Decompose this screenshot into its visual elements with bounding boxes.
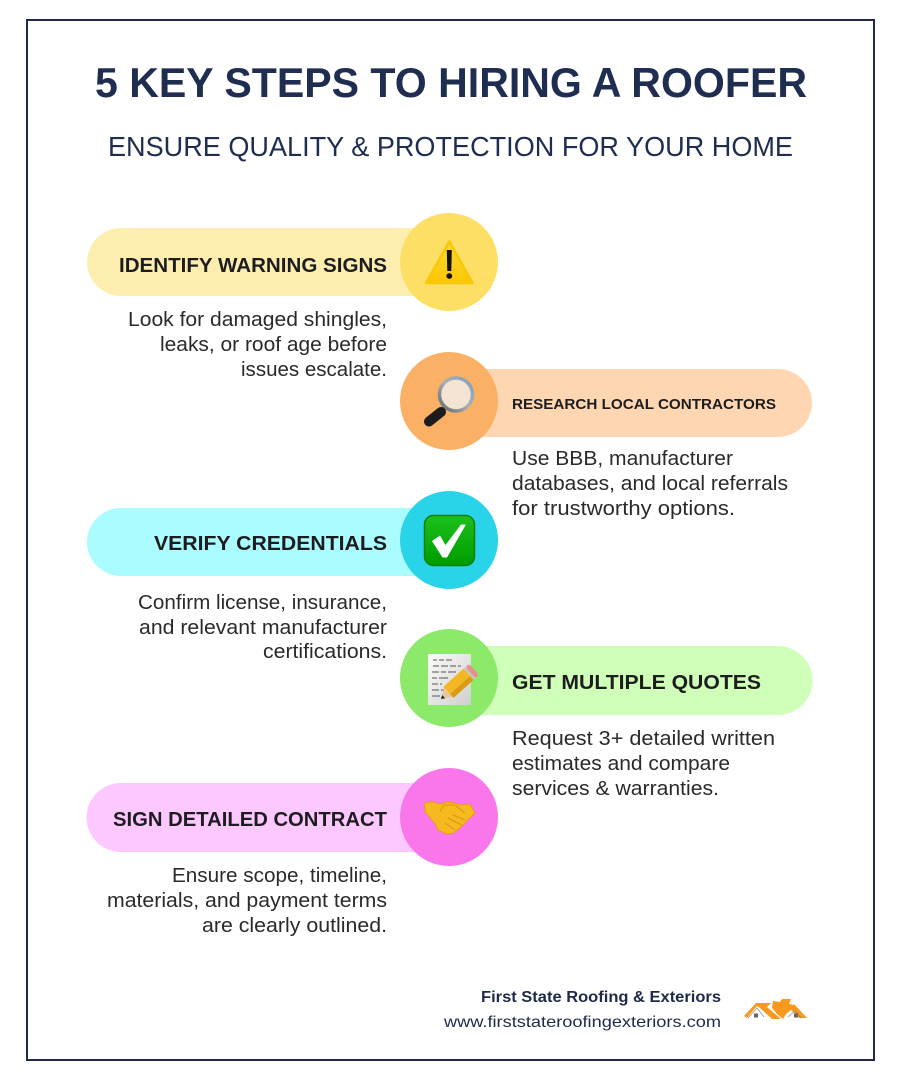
icon: warning triangle <box>426 242 472 283</box>
icon: magnifying glass <box>429 378 472 422</box>
step 3: verify credentials <box>87 491 498 663</box>
pencil <box>436 664 479 705</box>
title: 5 KEY STEPS TO HIRING A ROOFER <box>95 59 807 106</box>
step 2 description <box>512 448 788 520</box>
icon: handshake <box>424 802 475 834</box>
footer: company name: First State Roofing & Exteriors <box>481 989 721 1006</box>
step 5 description <box>107 865 387 937</box>
icon: memo and pencil <box>428 654 479 705</box>
step 1 description <box>128 309 387 381</box>
step 5: sign detailed contract <box>87 768 498 937</box>
step 2 description: Use BBB, manufacturer <box>512 448 733 470</box>
step 5 label: SIGN DETAILED CONTRACT <box>113 809 387 831</box>
step 4 description: estimates and compare <box>512 753 730 775</box>
step 4 description: Request 3+ detailed written <box>512 728 775 750</box>
step 1 label: IDENTIFY WARNING SIGNS <box>119 255 387 277</box>
step 1 description: issues escalate. <box>241 359 387 381</box>
step 5 description: materials, and payment terms <box>107 890 387 912</box>
step 3 description: and relevant manufacturer <box>139 617 387 639</box>
step 4 label: GET MULTIPLE QUOTES <box>512 672 761 694</box>
step 3 description <box>138 592 387 663</box>
step 1 description: leaks, or roof age before <box>160 334 387 356</box>
step 3 circle <box>400 491 498 589</box>
step 4 circle <box>400 629 498 727</box>
icon: green check box <box>424 516 474 566</box>
step 2 description: for trustworthy options. <box>512 498 735 520</box>
step 5 description: are clearly outlined. <box>202 915 387 937</box>
step 5 circle <box>400 768 498 866</box>
step 3 description: certifications. <box>263 641 387 663</box>
step 5 pill <box>87 783 430 852</box>
subtitle: ENSURE QUALITY & PROTECTION FOR YOUR HOME <box>108 131 793 162</box>
step 3 pill <box>87 508 430 576</box>
step 5 description: Ensure scope, timeline, <box>172 865 387 887</box>
step 1 description: Look for damaged shingles, <box>128 309 387 331</box>
step 1: identify warning signs <box>87 213 498 381</box>
footer: website: www.firststateroofingexteriors.com <box>443 1014 721 1031</box>
step 3 label: VERIFY CREDENTIALS <box>154 533 387 555</box>
step 2: research local contractors <box>400 352 812 520</box>
step 2 label: RESEARCH LOCAL CONTRACTORS <box>512 396 776 413</box>
step 2 description: databases, and local referrals <box>512 473 788 495</box>
step 4 description <box>512 728 775 800</box>
step 1 pill <box>87 228 430 296</box>
step 3 description: Confirm license, insurance, <box>138 592 387 614</box>
icon: roof logo <box>744 999 807 1019</box>
step 4 description: services & warranties. <box>512 778 719 800</box>
step 4: get multiple quotes <box>400 629 813 800</box>
step 1 circle <box>400 213 498 311</box>
step 2 circle <box>400 352 498 450</box>
step 2 pill <box>470 369 812 437</box>
step 4 pill <box>470 646 813 715</box>
